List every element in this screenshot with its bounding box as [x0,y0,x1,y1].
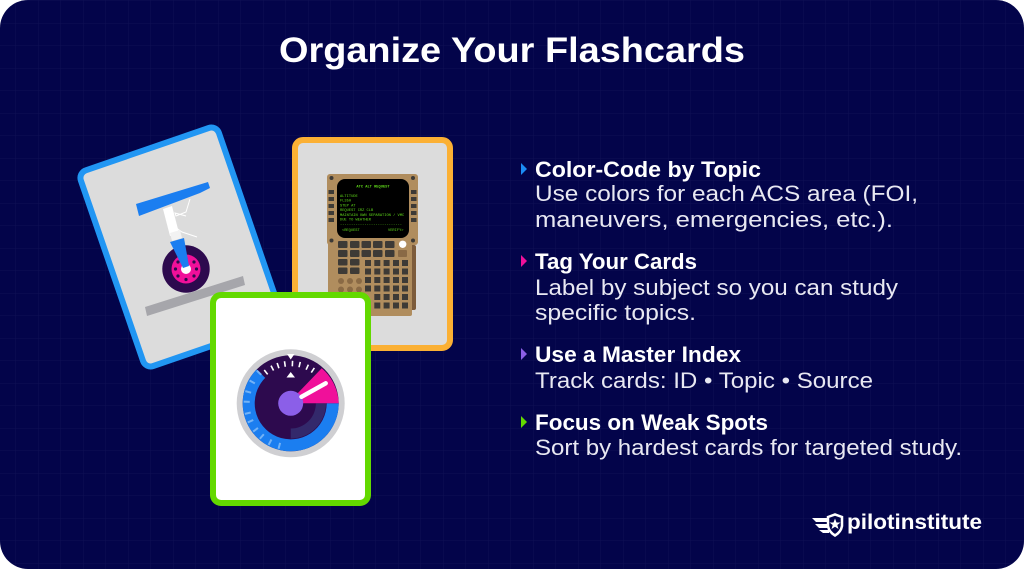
card: flight computer (orange) [295,140,450,348]
bullet: use a master index [521,342,873,393]
bullet: tag your cards: specific topics. [535,300,696,325]
icon: green arrow [521,416,527,428]
icon: landing gear [136,182,245,316]
screen text: FL350 [340,200,351,204]
screen text: MAINTAIN OWN SEPARATION / VMC [340,213,405,218]
icon: purple arrow [521,348,527,360]
icon: blue arrow [521,163,527,175]
screen text: REQUEST CRZ CLB [340,209,374,213]
screen text: ---------------------------- [340,223,402,227]
bullet: use a master index: Track cards: ID • Topic • Source [535,368,873,393]
icon: pink arrow [521,255,527,267]
screen text: ATC ALT REQUEST [356,186,390,190]
bullet: focus on weak spots [521,410,962,460]
bullet: tag your cards: Tag Your Cards [535,249,697,274]
icon: winged shield [812,514,842,536]
bullet: color-code by topic: maneuvers, emergencies, etc.). [535,207,893,232]
bullet: color-code by topic: Color-Code by Topic [535,157,761,182]
bullet: focus on weak spots: Sort by hardest cards for targeted study. [535,435,962,460]
title: Organize Your Flashcards [279,31,745,70]
bullet: use a master index: Use a Master Index [535,342,742,367]
screen text: VERIFY> [388,228,404,233]
logo: pilot institute: pilotinstitute [847,510,982,534]
screen text [340,186,405,233]
bullet: focus on weak spots: Focus on Weak Spots [535,410,768,435]
screen text: ALTITUDE [340,195,358,199]
icon: flight management computer [327,174,418,316]
bullet: color-code by topic: Use colors for each ACS area (FOI, [535,181,918,206]
card: gauge (green) [213,295,368,503]
icon: gauge [237,349,345,457]
bullet: tag your cards [521,249,898,325]
screen text: <REQUEST [342,228,360,233]
card: landing gear (blue) [78,125,284,369]
screen text: DUE TO WEATHER [340,218,372,222]
bullet: tag your cards: Label by subject so you can study [535,275,898,300]
bullet: color-code by topic [521,157,918,232]
screen text: STEP AT [340,204,356,208]
